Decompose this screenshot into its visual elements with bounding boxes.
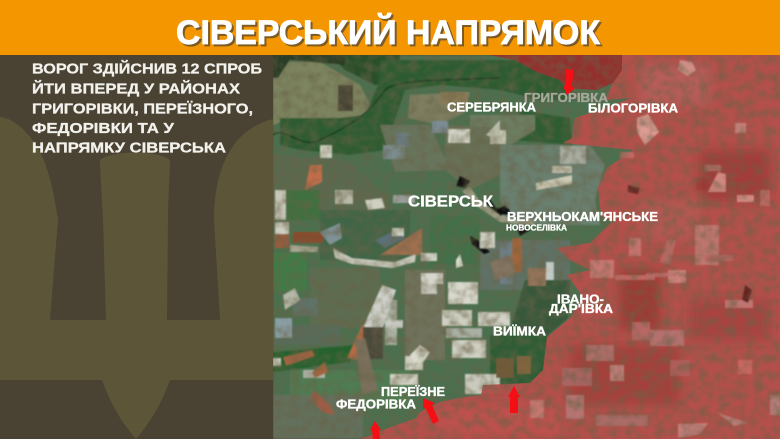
overlay field patches (530, 60, 780, 438)
arrow: Федорівка (370, 421, 381, 439)
label: Серебрянка: СЕРЕБРЯНКА (447, 100, 536, 114)
place labels (336, 91, 678, 412)
label: Переїзне: ПЕРЕЇЗНЕ (381, 384, 445, 399)
label: Івано-Дар'ївка (549, 292, 613, 316)
label: Григорівка: ГРИГОРІВКА (524, 91, 608, 105)
enemy-held territory overlay (361, 55, 780, 439)
text block: situation summary: ГРИГОРІВКИ, ПЕРЕЇЗНОГО, (32, 100, 253, 118)
arrow: Переїзне (423, 398, 439, 424)
map terrain (273, 55, 633, 439)
overlay shading (440, 65, 770, 435)
title: СІВЕРСЬКИЙ НАПРЯМОК (178, 15, 602, 54)
text block: situation summary: ВОРОГ ЗДІЙСНИВ 12 СПРОБ (32, 60, 262, 78)
label: Верхньокам'янське: ВЕРХНЬОКАМ'ЯНСЬКЕ (507, 210, 658, 224)
label: Білогорівка: БІЛОГОРІВКА (588, 102, 678, 116)
text block: situation summary: ФЕДОРІВКИ ТА У (32, 121, 175, 137)
panel: left text background (0, 55, 273, 439)
text block: situation summary (32, 60, 262, 156)
label: Івано-Дар'ївка: ДАР'ІВКА (549, 302, 613, 316)
label: Новоселівка: НОВОСЕЛІВКА (506, 222, 567, 232)
header bar (0, 0, 780, 55)
panel: satellite map (273, 55, 780, 439)
arrows: enemy attack directions (370, 69, 575, 439)
arrow: Григорівка (563, 69, 575, 95)
arrow: Виїмка (508, 386, 520, 413)
title: СІВЕРСЬКИЙ НАПРЯМОК (176, 13, 600, 52)
label: Федорівка: ФЕДОРІВКА (336, 398, 416, 412)
label: Виїмка: ВИЇМКА (493, 324, 546, 338)
text block: situation summary: ЙТИ ВПЕРЕД У РАЙОНАХ (32, 80, 240, 98)
text block: situation summary: НАПРЯМКУ СІВЕРСЬКА (32, 140, 227, 156)
icon: trident emblem (0, 117, 273, 439)
label: Сіверськ: СІВЕРСЬК (408, 194, 494, 210)
map field patches (273, 120, 586, 415)
label: Івано-Дар'ївка: ІВАНО- (557, 292, 604, 306)
map photo grain (273, 55, 780, 439)
